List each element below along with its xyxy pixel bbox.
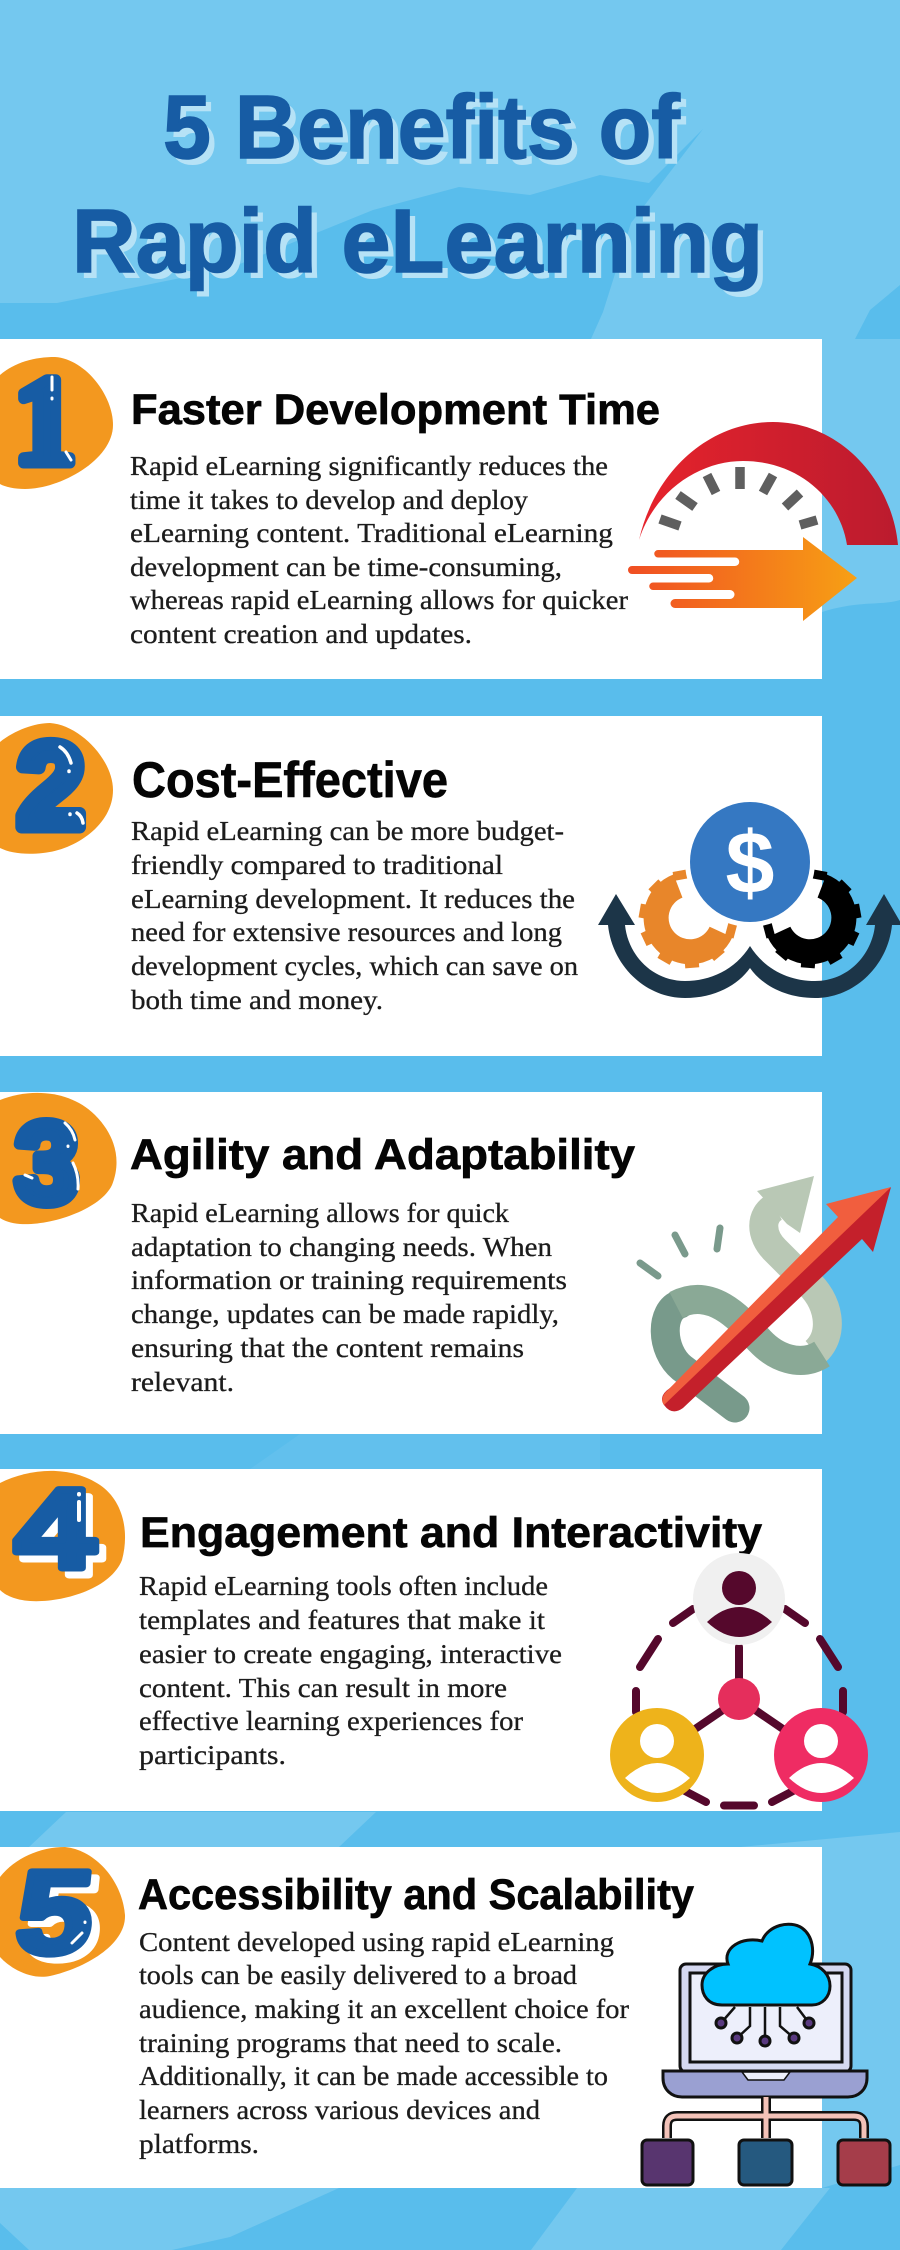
body text: development can be time-consuming, — [130, 551, 562, 582]
body text: training programs that need to scale. — [139, 2027, 562, 2058]
heading: Accessibility and Scalability — [138, 1872, 694, 1919]
body text — [130, 450, 628, 649]
body text: information or training requirements — [131, 1264, 567, 1295]
top person — [693, 1553, 785, 1645]
body text: templates and features that make it — [139, 1604, 545, 1635]
body text: change, updates can be made rapidly, — [131, 1298, 559, 1329]
pink person — [774, 1708, 868, 1802]
panel: benefit 4 — [0, 1464, 868, 1811]
number badge 2 — [0, 719, 113, 854]
yellow person — [610, 1708, 704, 1802]
number badge 2: 2 — [18, 719, 84, 853]
number badge 4 — [0, 1464, 125, 1601]
number badge 5: 5 — [19, 1853, 107, 1985]
black gear — [763, 870, 861, 968]
heading: Cost-Effective — [132, 752, 448, 808]
number badge 1 — [0, 352, 113, 491]
number badge 4: 4 — [21, 1471, 103, 1599]
body text: need for extensive resources and long — [131, 916, 562, 947]
icon: cost gears and dollar — [598, 797, 900, 998]
icon: agility infinity arrow — [640, 1176, 891, 1411]
title: Rapid eLearning — [78, 198, 769, 298]
body text: Additionally, it can be made accessible to — [139, 2060, 608, 2091]
body text: adaptation to changing needs. When — [131, 1231, 552, 1262]
number badge 5 — [0, 1847, 125, 1985]
connectors — [667, 2097, 864, 2138]
dollar coin: $ — [726, 813, 774, 912]
title — [72, 78, 769, 298]
body text: platforms. — [139, 2128, 259, 2159]
body text: time it takes to develop and deploy — [130, 484, 528, 515]
cloud — [702, 1924, 830, 2005]
body text: Rapid eLearning allows for quick — [131, 1197, 509, 1228]
body text: whereas rapid eLearning allows for quicker — [130, 584, 628, 615]
panel: benefit 1 — [0, 339, 898, 679]
body text — [131, 1197, 567, 1397]
body text: Content developed using rapid eLearning — [139, 1926, 614, 1957]
body text: participants. — [139, 1739, 286, 1770]
body text: eLearning content. Traditional eLearning — [130, 517, 613, 548]
icon: speedometer with arrow — [628, 422, 898, 621]
number badge 4: 4 — [14, 1464, 96, 1592]
heading: Faster Development Time — [131, 387, 660, 434]
number badge 3 — [0, 1093, 117, 1227]
body text: both time and money. — [131, 984, 383, 1015]
number badge 1: 1 — [14, 352, 76, 491]
dollar coin — [685, 797, 815, 927]
body text: Rapid eLearning significantly reduces the — [130, 450, 608, 481]
body text: relevant. — [131, 1366, 234, 1397]
body text: content creation and updates. — [130, 618, 472, 649]
title: Rapid eLearning — [72, 192, 763, 292]
body text: Rapid eLearning tools often include — [139, 1570, 548, 1601]
body text: ensuring that the content remains — [131, 1332, 524, 1363]
body text — [139, 1570, 562, 1770]
orange gear — [639, 870, 737, 968]
body text: eLearning development. It reduces the — [131, 883, 575, 914]
body text — [139, 1926, 629, 2159]
panel: benefit 5 — [0, 1847, 890, 2188]
icon: connected people network — [610, 1553, 868, 1806]
body text: easier to create engaging, interactive — [139, 1638, 562, 1669]
heading: Engagement and Interactivity — [140, 1510, 762, 1557]
body text: tools can be easily delivered to a broad — [139, 1959, 577, 1990]
body text: development cycles, which can save on — [131, 950, 578, 981]
body text: Rapid eLearning can be more budget- — [131, 815, 564, 846]
double arrow — [598, 894, 900, 998]
title: 5 Benefits of — [163, 78, 681, 178]
body text — [131, 815, 578, 1015]
number badge 3: 3 — [15, 1100, 79, 1227]
heading: Agility and Adaptability — [130, 1132, 635, 1179]
panel: benefit 3 — [0, 1092, 891, 1434]
body text: effective learning experiences for — [139, 1705, 523, 1736]
body text: content. This can result in more — [139, 1672, 507, 1703]
circuit lines — [721, 2007, 809, 2041]
body text: audience, making it an excellent choice for — [139, 1993, 629, 2024]
panel: benefit 2 — [0, 716, 900, 1056]
number badge 5: 5 — [11, 1847, 99, 1979]
body text: friendly compared to traditional — [131, 849, 503, 880]
title: 5 Benefits of — [169, 84, 687, 184]
body text: learners across various devices and — [139, 2094, 540, 2125]
icon: cloud laptop network — [642, 1924, 890, 2185]
